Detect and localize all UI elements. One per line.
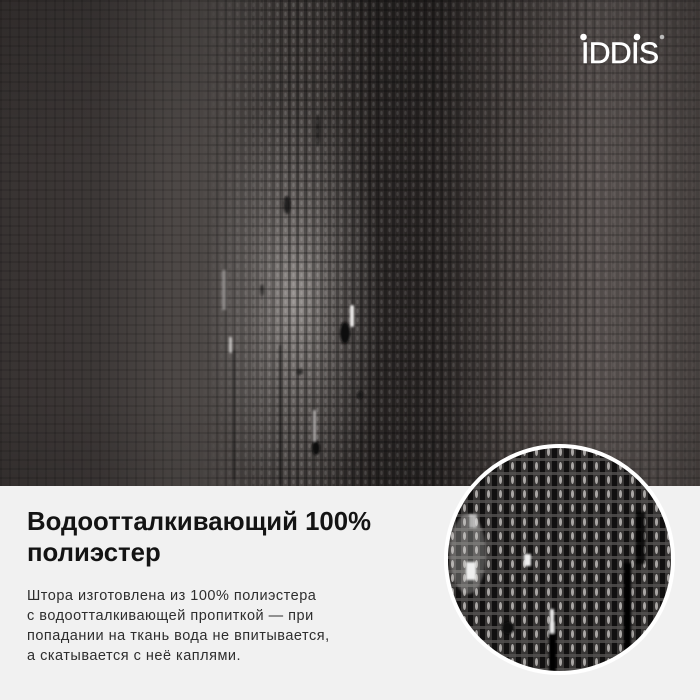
zoomed fabric circle	[444, 444, 675, 675]
photo: wet dark curtain fabric	[0, 0, 700, 486]
description text: с водоотталкивающей пропиткой — при	[27, 608, 314, 624]
description text: Штора изготовлена из 100% полиэстера	[27, 588, 316, 604]
heading: Водоотталкивающий 100%	[27, 508, 371, 536]
heading: полиэстер	[27, 539, 161, 567]
description text: попадании на ткань вода не впитывается,	[27, 628, 330, 644]
heading	[27, 508, 371, 567]
description text	[27, 588, 330, 664]
water streaks and drops	[233, 114, 363, 485]
description text: а скатывается с неё каплями.	[27, 648, 241, 664]
